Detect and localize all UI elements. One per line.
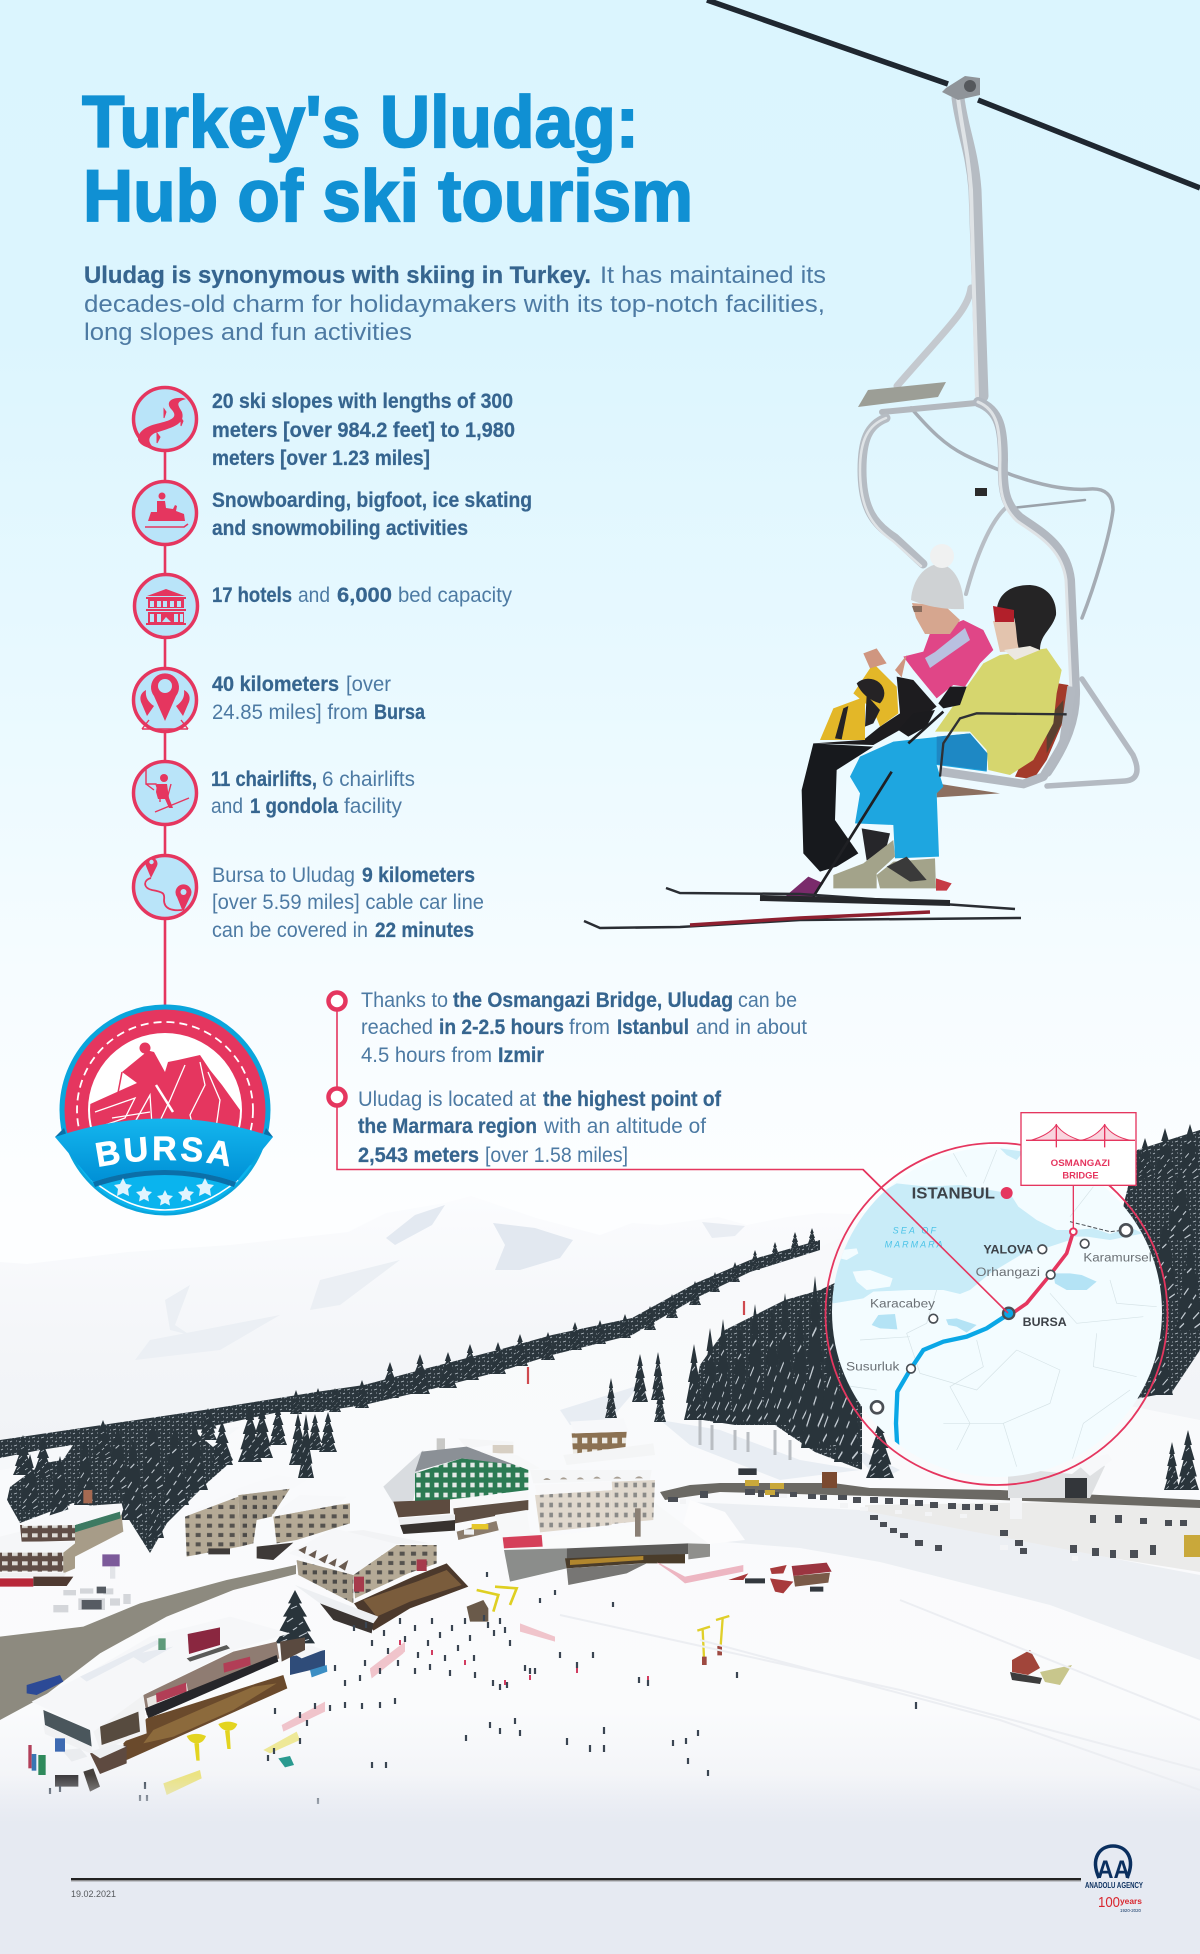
footer rule [71, 1878, 1081, 1881]
central forest [605, 1270, 894, 1478]
date: 19.02.2021 [71, 1889, 116, 1900]
list item: distance: [over [346, 673, 391, 696]
lift bases [702, 1646, 722, 1665]
building: brown house [563, 1418, 655, 1465]
callout text: Osmangazi Bridge: the Osmangazi Bridge, Uludag [453, 989, 733, 1012]
callout pointer over map [863, 1170, 1008, 1313]
badge: stars [114, 1178, 214, 1206]
chairlift with two skiers [584, 0, 1200, 928]
map: places and labels: Karamursel [1083, 1250, 1152, 1264]
buildings: left cluster [0, 1475, 468, 1795]
slope shadows [560, 1385, 900, 1480]
callout bullet: altitude [328, 1088, 346, 1106]
list item: lifts: facility [344, 795, 402, 818]
badge: label: BURSA [96, 1136, 230, 1167]
icon: ski slope [134, 388, 196, 450]
map: places and labels: SEA OF [893, 1225, 936, 1235]
icon: cable car route [134, 856, 196, 918]
building: Prime restaurant [27, 1617, 405, 1795]
callout text: Osmangazi Bridge: 4.5 hours from [361, 1044, 492, 1067]
intro text: Uludag is synonymous with skiing in Turkey. [84, 262, 591, 289]
list item: hotels: 17 hotels [212, 584, 292, 607]
footer band [0, 1825, 1200, 1954]
safety bar [940, 713, 1067, 777]
bridge callout box [1021, 1113, 1136, 1228]
logo: Anadolu Agency: AA [1097, 1856, 1130, 1884]
intro text: It has maintained its [600, 262, 826, 289]
map circle [823, 1113, 1168, 1485]
right forest [1110, 1124, 1200, 1490]
list item: lifts: 1 gondola [250, 795, 338, 818]
callout text: altitude: 2,543 meters [358, 1144, 479, 1167]
list item: hotels [212, 584, 512, 607]
callout text: Osmangazi Bridge [361, 989, 807, 1067]
snow net [370, 1623, 555, 1678]
building: green hotel [383, 1438, 540, 1540]
seat [937, 783, 1000, 797]
intro text: decades-old charm for holidaymakers with its top-notch facilities, [84, 291, 825, 318]
yellow lift bases [163, 1722, 300, 1795]
callout text: Osmangazi Bridge: from [569, 1016, 610, 1039]
distant snow mountain [0, 1196, 1200, 1560]
list item: ski slopes: meters [over 1.23 miles] [212, 447, 430, 470]
left skier head [911, 544, 970, 668]
chair hanger [860, 98, 1137, 786]
callout text: Osmangazi Bridge: Izmir [498, 1044, 544, 1067]
pink nets [282, 1642, 405, 1732]
map: places and labels: Karacabey [870, 1296, 936, 1310]
building: tan hotel [182, 1475, 350, 1560]
hut and snowmobiles [728, 1468, 832, 1593]
right skier jacket [935, 648, 1062, 775]
map: places and labels: Orhangazi [976, 1265, 1040, 1279]
skiers on the slope [50, 1572, 916, 1804]
map: places and labels: MARMARA [885, 1239, 943, 1249]
badge: ribbon [55, 1118, 273, 1182]
right skier head [993, 585, 1056, 660]
left skier jacket [903, 620, 993, 698]
icon: hotel [134, 574, 198, 638]
building: left hotel [0, 1490, 131, 1612]
list item: hotels: bed capacity [398, 584, 512, 607]
callout text: altitude: with an altitude of [543, 1115, 706, 1138]
left forest [0, 1405, 337, 1553]
list item: hotels: 6,000 [337, 584, 392, 607]
coloured skier details [400, 1640, 648, 1685]
near slope [0, 1238, 1200, 1830]
building: chalet hotel [288, 1528, 468, 1633]
list item: lifts [211, 768, 415, 818]
yellow lift pylons [697, 1616, 729, 1665]
map: places and labels: YALOVA [983, 1242, 1034, 1256]
seat and skiers [785, 620, 1072, 898]
title [82, 82, 693, 237]
list item: cable car: can be covered in [212, 919, 368, 942]
list item: distance: 40 kilometers [212, 673, 339, 696]
road [0, 1565, 296, 1720]
logo: Anadolu Agency: ANADOLU AGENCY [1085, 1880, 1143, 1890]
logo: Anadolu Agency: years [1120, 1897, 1143, 1906]
list item: activities: and snowmobiling activities [212, 517, 468, 540]
Bursa badge [55, 1004, 273, 1216]
list item: hotels: and [298, 584, 330, 607]
icon: chairlift [134, 762, 196, 824]
badge: skier and mountains [90, 1042, 240, 1127]
callout text: Osmangazi Bridge: Istanbul [617, 1016, 689, 1039]
callout text: altitude: Uludag is located at [358, 1088, 536, 1111]
list item: cable car: [over 5.59 miles] cable car line [212, 891, 484, 914]
backpack [813, 648, 937, 745]
list item: cable car [212, 864, 484, 942]
logo: Anadolu Agency: 100 [1098, 1894, 1120, 1911]
list item: activities [212, 489, 532, 540]
callout text: Osmangazi Bridge: Thanks to [361, 989, 448, 1012]
callout text: Osmangazi Bridge: can be [738, 989, 797, 1012]
building: cable car station [1008, 1454, 1112, 1498]
logo: Anadolu Agency: 1920-2020 [1120, 1908, 1141, 1913]
list item: cable car: 9 kilometers [362, 864, 475, 887]
list item: ski slopes [212, 390, 515, 470]
callout text: altitude: the Marmara region [358, 1115, 537, 1138]
icon: location pins [134, 668, 196, 732]
icon: snowmobile [134, 482, 196, 544]
bridge callout box: BRIDGE [1062, 1171, 1099, 1181]
badge: lower cap [78, 1165, 252, 1213]
list item: distance: 24.85 miles] from [212, 701, 368, 724]
list item: cable car: Bursa to Uludag [212, 864, 355, 887]
bare trees near forest [700, 1420, 790, 1460]
map: sea and lakes [823, 1148, 1157, 1467]
bridge callout box: OSMANGAZI [1051, 1158, 1110, 1168]
left skier legs [802, 743, 873, 872]
title: Turkey's Uludag: [82, 82, 639, 163]
list item: distance: Bursa [374, 701, 425, 724]
tree line along the ridge [0, 1228, 820, 1462]
map: places and labels: BURSA [1023, 1315, 1067, 1329]
buildings: central cluster [370, 1418, 832, 1678]
snow grooming tracks [560, 1600, 1200, 1790]
map: roads [896, 1314, 1009, 1448]
callout text: Osmangazi Bridge: in 2-2.5 hours [439, 1016, 564, 1039]
snow bank and parking lot [660, 1472, 1200, 1660]
list item: lifts: and [211, 795, 243, 818]
fir tree by restaurant [275, 1590, 315, 1643]
title: Hub of ski tourism [83, 156, 693, 237]
list item: ski slopes: meters [over 984.2 feet] to 1,980 [212, 419, 515, 442]
callout connector [337, 1001, 1008, 1313]
list item: cable car: 22 minutes [375, 919, 474, 942]
map: places and labels: Susurluk [846, 1360, 900, 1374]
intro text: long slopes and fun activities [84, 319, 412, 346]
photo fade into footer [0, 1775, 1200, 1825]
callout text: altitude [358, 1088, 722, 1167]
boots [862, 828, 890, 861]
hut on slope [467, 1600, 488, 1622]
list item: distance [212, 673, 425, 724]
right skier pants [850, 733, 987, 858]
map: outer ring [826, 1143, 1168, 1485]
icon: suspension bridge [1026, 1124, 1135, 1147]
callout text: altitude: the highest point of [543, 1088, 722, 1111]
list item: lifts: 6 chairlifts [322, 768, 415, 791]
building: cream hotel and hall [495, 1470, 743, 1585]
ski poles [813, 712, 943, 897]
yellow pylons by hut [477, 1587, 517, 1612]
logo: Anadolu Agency [1085, 1846, 1143, 1913]
photo: Uludag ski resort panorama [0, 1124, 1200, 1830]
callout bullet: Osmangazi Bridge [328, 992, 346, 1010]
map: places and labels: ISTANBUL [912, 1185, 995, 1202]
skis [584, 888, 1021, 928]
cable [707, 0, 1200, 188]
gloves [898, 687, 967, 737]
timeline connector [164, 440, 166, 1008]
callout text: Osmangazi Bridge: and in about [696, 1016, 807, 1039]
red slope markers [528, 1301, 744, 1384]
snow groomer [1010, 1650, 1072, 1685]
list item: ski slopes: 20 ski slopes with lengths of 300 [212, 390, 513, 413]
callout text: altitude: [over 1.58 miles] [485, 1144, 628, 1167]
intro text [84, 262, 826, 346]
list item: lifts: 11 chairlifts, [211, 768, 317, 791]
callout text: Osmangazi Bridge: reached [361, 1016, 433, 1039]
list item: activities: Snowboarding, bigfoot, ice skating [212, 489, 532, 512]
map: places and labels [846, 1185, 1152, 1413]
